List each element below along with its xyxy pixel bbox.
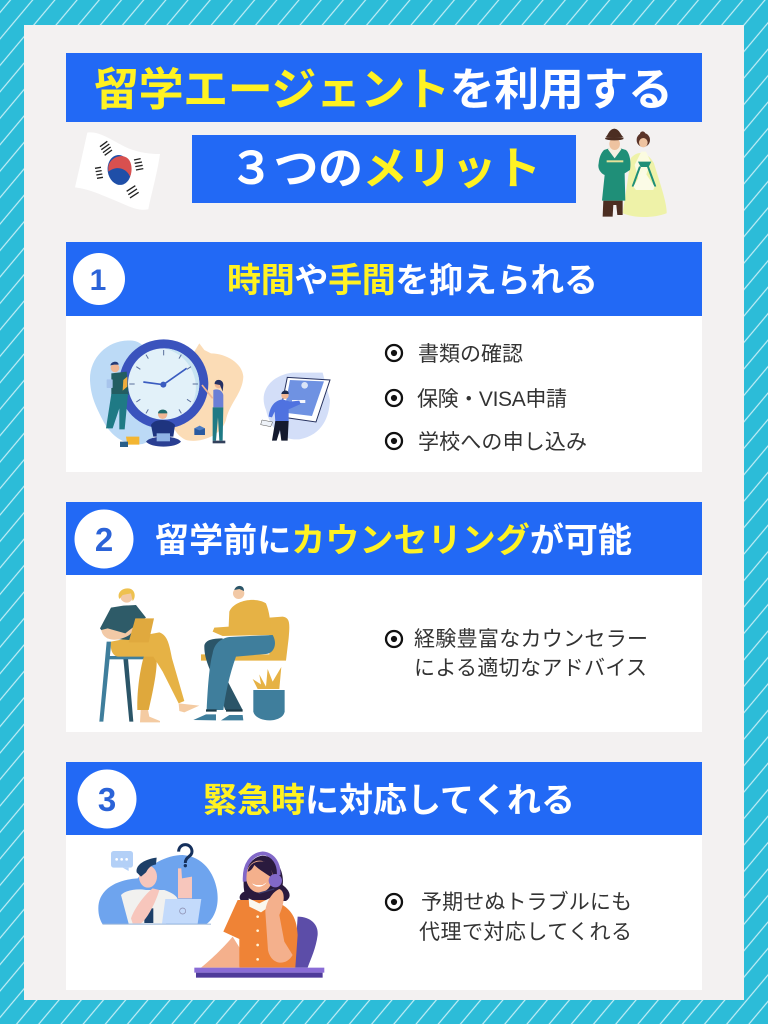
text: experienced counsellor [386, 628, 648, 680]
section 2 body [66, 575, 702, 732]
section 2 header [66, 502, 702, 575]
section 1 header: 時間や手間を抑えられる [227, 262, 598, 300]
section 1 [66, 242, 702, 472]
title bar: line 1 [66, 53, 702, 122]
section 3 header [66, 762, 702, 835]
section 2 header: 留学前にカウンセリングが可能 [155, 521, 632, 560]
number badge 3 [78, 770, 136, 828]
item: school application: 学校への申し込み [418, 431, 587, 454]
text: experienced counsellor: 経験豊富なカウンセラー [414, 628, 648, 651]
title bar: line 2: ３つのメリット [229, 143, 541, 194]
number badge 1 [73, 253, 125, 305]
section 3 [66, 762, 702, 990]
section 1 body [66, 316, 702, 472]
section 3 body [66, 835, 702, 990]
title bar: line 2 [192, 135, 576, 203]
number badge 2 [74, 510, 134, 568]
section 3 header: 緊急時に対応してくれる [203, 782, 575, 820]
text: emergency support: 代理で対応してくれる [419, 921, 632, 944]
icon: couple in hanbok [598, 129, 667, 217]
text: emergency support: 予期せぬトラブルにも [421, 891, 632, 914]
number badge 1: 1 [90, 264, 106, 297]
number badge 2: 2 [95, 521, 113, 558]
illustration: confused person and support operator [98, 845, 324, 978]
illustration: people around a clock [90, 339, 330, 447]
section 1 header [66, 242, 702, 316]
item: insurance and visa: 保険・VISA申請 [417, 388, 567, 411]
title bar: line 1: 留学エージェントを利用する [94, 64, 673, 115]
text: experienced counsellor: による適切なアドバイス [414, 657, 647, 680]
item: documents: 書類の確認 [418, 343, 523, 366]
section 2 [66, 502, 702, 732]
illustration: counselling [99, 586, 289, 722]
checklist 1 [386, 343, 587, 454]
number badge 3: 3 [98, 781, 116, 818]
icon: Korean flag [75, 132, 160, 210]
text: emergency support [386, 891, 632, 944]
